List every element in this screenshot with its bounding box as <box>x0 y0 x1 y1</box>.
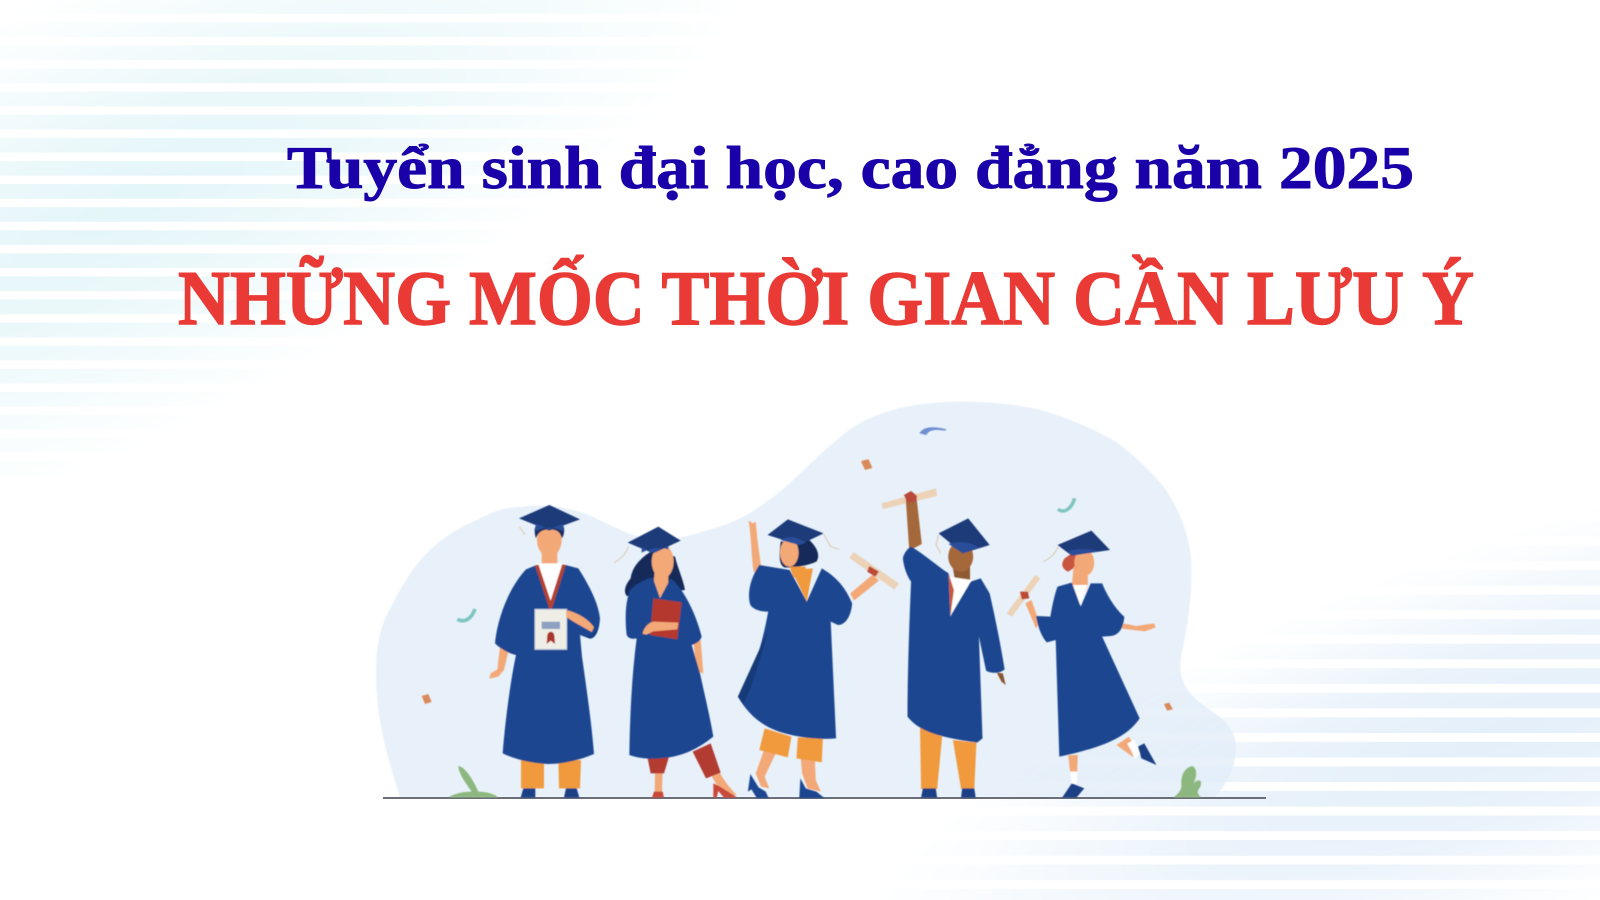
illustration background blob <box>376 402 1236 797</box>
subtitle: Tuyển sinh đại học, cao đẳng năm 2025 <box>287 135 1414 201</box>
graduate four: man raising diploma <box>881 488 1006 798</box>
main title: NHỮNG MỐC THỜI GIAN CẦN LƯU Ý <box>178 255 1474 341</box>
background stripes: bottom right <box>1022 556 1600 900</box>
plant left <box>448 766 498 797</box>
confetti right <box>862 427 1173 711</box>
graduates three, four, five with right confetti <box>738 427 1201 798</box>
graduates one and two with left confetti <box>422 459 872 798</box>
ground line <box>383 797 1266 799</box>
plant right <box>1174 766 1201 797</box>
graduate one: man with certificate <box>489 505 600 798</box>
confetti left <box>422 459 872 704</box>
graduate two: woman with book <box>614 527 737 798</box>
illustration: five graduates <box>422 427 1201 798</box>
background stripes: top left <box>0 0 584 429</box>
graduate three: woman with diploma <box>738 519 897 798</box>
graduate five: woman dancing <box>1009 531 1156 798</box>
